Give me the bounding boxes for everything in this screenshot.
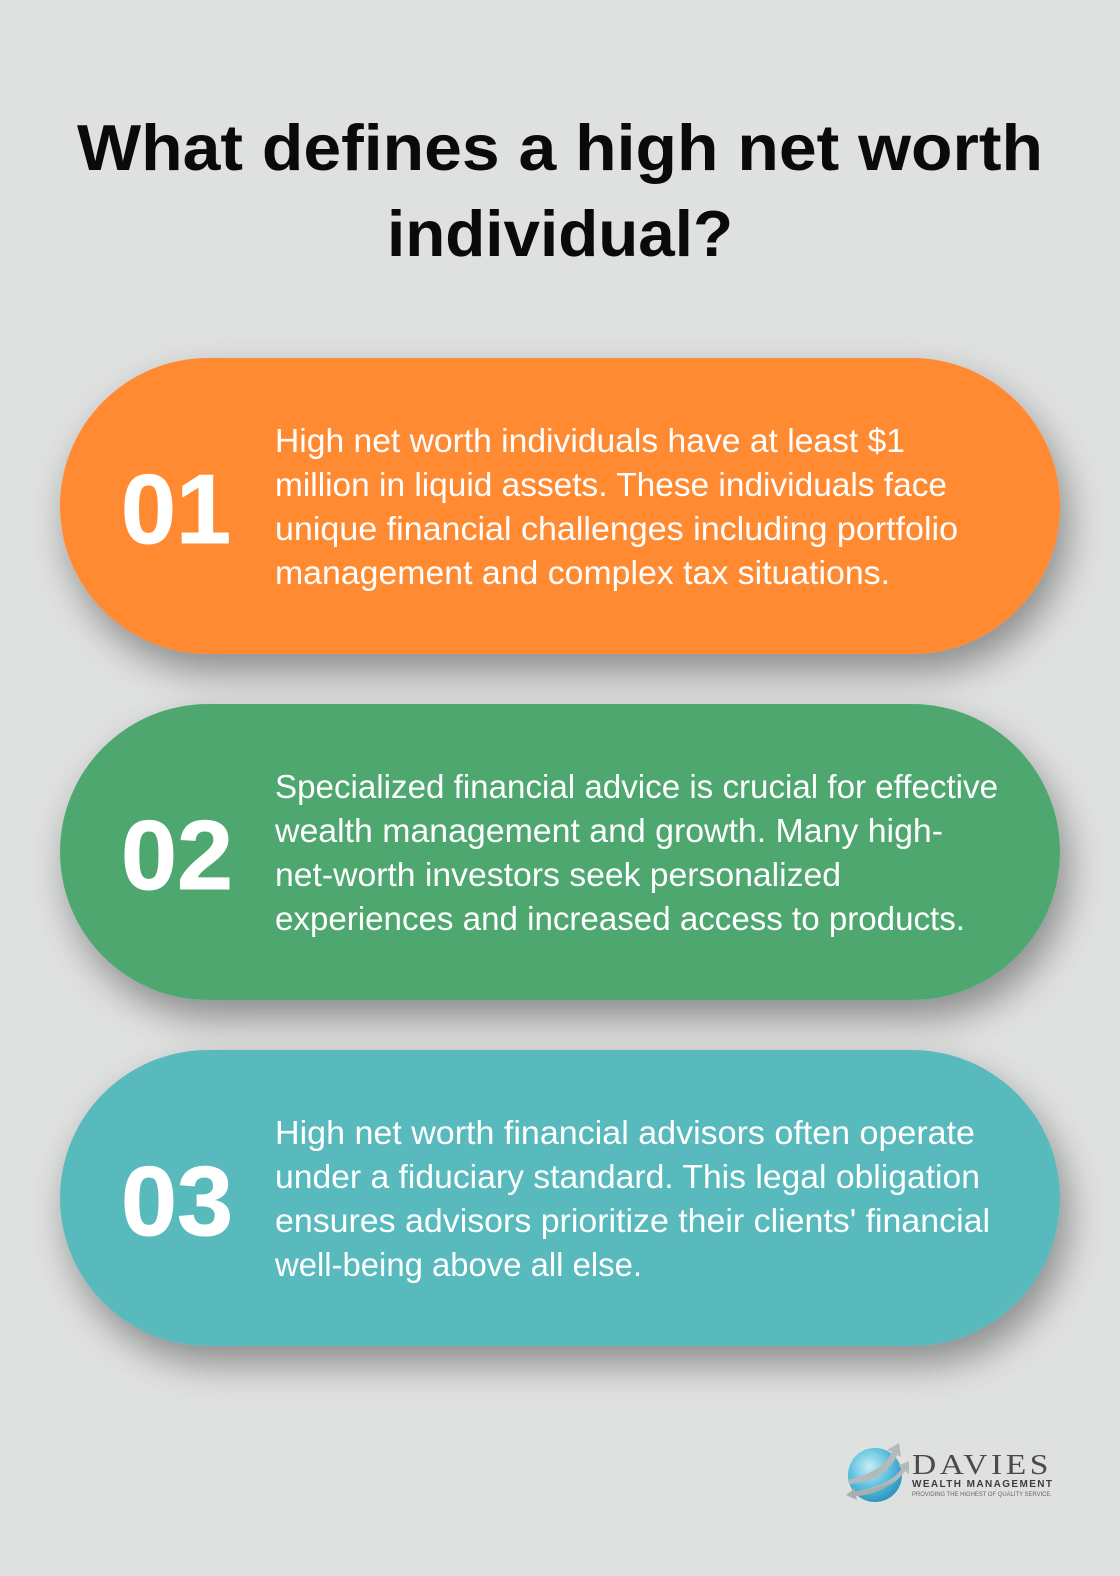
text block: card 03 description: under a fiduciary standard. This legal obligation (275, 1158, 980, 1195)
number 02: 02 (121, 800, 233, 910)
text block: card 03 description (274, 1114, 990, 1283)
text block: card 01 description: unique financial challenges including portfolio (275, 510, 958, 547)
text block: card 03 description: ensures advisors prioritize their clients' financial (275, 1202, 990, 1239)
teal pill (60, 1050, 1060, 1346)
orange pill (60, 358, 1060, 654)
text block: card 03 description: well-being above all else. (274, 1246, 642, 1283)
text block: card 02 description (274, 768, 998, 937)
logo: Davies Wealth Management (846, 1443, 1052, 1502)
text block: card 02 description: net-worth investors seek personalized (275, 856, 841, 893)
green pill (60, 704, 1060, 1000)
logo tagline: PROVIDING THE HIGHEST OF QUALITY SERVICE. (912, 1491, 1052, 1498)
icon: globe with arrows (846, 1443, 909, 1502)
title (77, 111, 1043, 270)
text block: card 02 description: Specialized financial advice is crucial for effective (275, 768, 998, 805)
text block: card 02 description: experiences and increased access to products. (275, 900, 965, 937)
title: individual? (387, 197, 733, 270)
text block: card 01 description: High net worth individuals have at least $1 (275, 422, 905, 459)
panel: card 02 (60, 704, 1060, 1000)
title: What defines a high net worth (77, 111, 1043, 184)
number 03: 03 (121, 1146, 233, 1256)
logo subtitle: WEALTH MANAGEMENT (912, 1479, 1052, 1490)
panel: card 01 (60, 358, 1060, 654)
logo wordmark: DAVIES (912, 1450, 1052, 1481)
text block: card 02 description: wealth management and growth. Many high- (274, 812, 943, 849)
text block: card 01 description: million in liquid assets. These individuals face (275, 466, 947, 503)
panel: card 03 (60, 1050, 1060, 1346)
number 01: 01 (121, 454, 231, 564)
text block: card 03 description: High net worth financial advisors often operate (275, 1114, 975, 1151)
text block: card 01 description (275, 422, 958, 591)
text block: card 01 description: management and complex tax situations. (275, 554, 890, 591)
